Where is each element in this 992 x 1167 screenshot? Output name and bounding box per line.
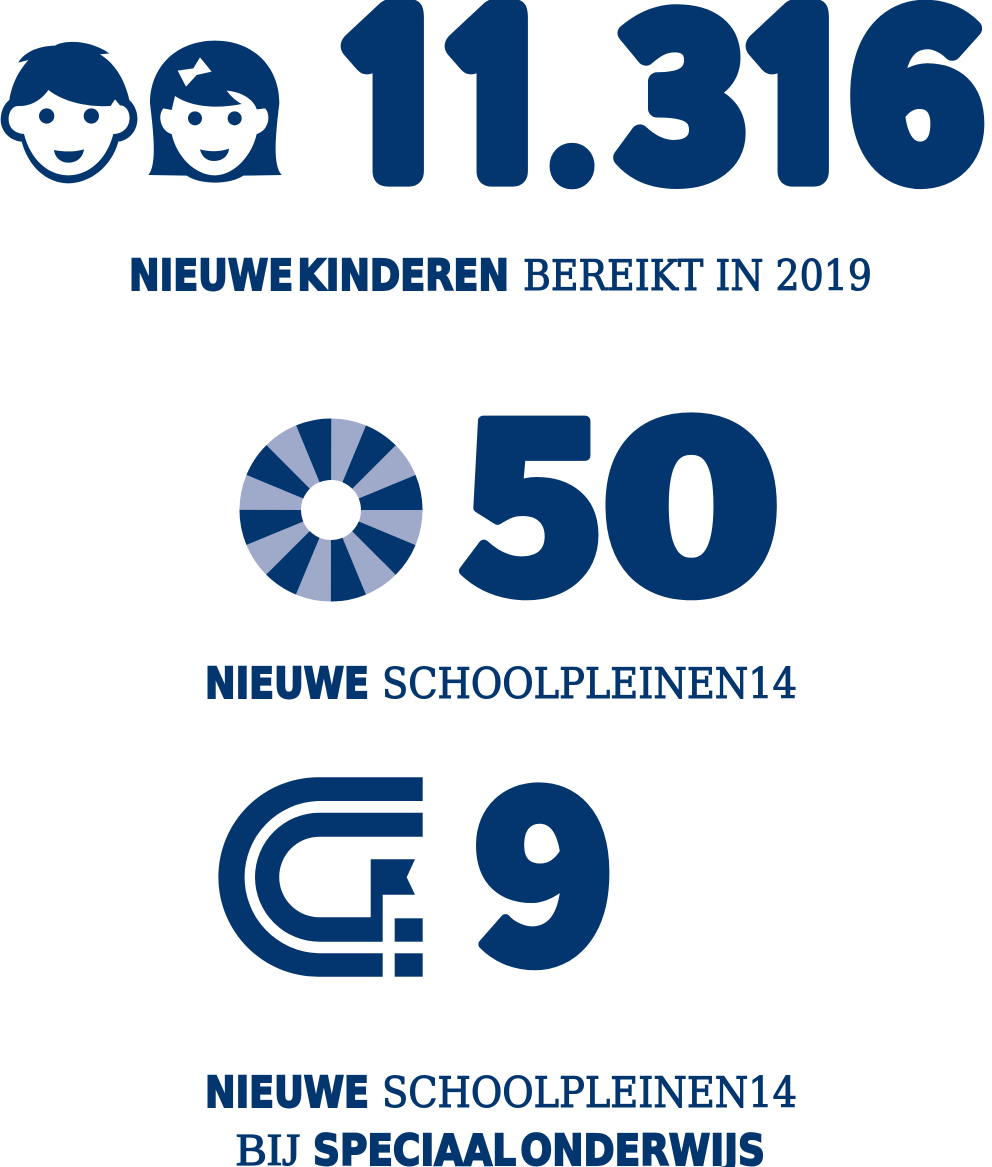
label: nieuwe schoolpleinen14 bij speciaal onderwijs: NIEUWE: [205, 1068, 369, 1118]
label: nieuwe kinderen bereikt in 2019: [129, 251, 872, 301]
icon: girl face: [148, 41, 282, 183]
number: 50: 0: [600, 318, 783, 660]
number: 50: [458, 318, 783, 661]
label: nieuwe schoolpleinen14: [205, 659, 797, 709]
label: nieuwe schoolpleinen14: NIEUWE: [205, 659, 369, 709]
icon: running track with flag: [218, 777, 423, 977]
label: nieuwe kinderen bereikt in 2019: BEREIKT IN 2019: [523, 251, 872, 300]
label: nieuwe kinderen bereikt in 2019: NIEUWE KINDEREN: [129, 251, 509, 301]
label: nieuwe schoolpleinen14: SCHOOLPLEINEN14: [382, 659, 797, 708]
icon: boy face: [1, 42, 137, 183]
icon: boy and girl faces: [1, 41, 282, 183]
icon: segmented wheel: [252, 431, 410, 589]
label: nieuwe schoolpleinen14 bij speciaal onderwijs: SCHOOLPLEINEN14: [382, 1068, 797, 1117]
label: nieuwe schoolpleinen14 bij speciaal onderwijs: [205, 1068, 797, 1167]
number: 50: 5: [458, 319, 607, 661]
number: 9: 9: [472, 688, 616, 1030]
